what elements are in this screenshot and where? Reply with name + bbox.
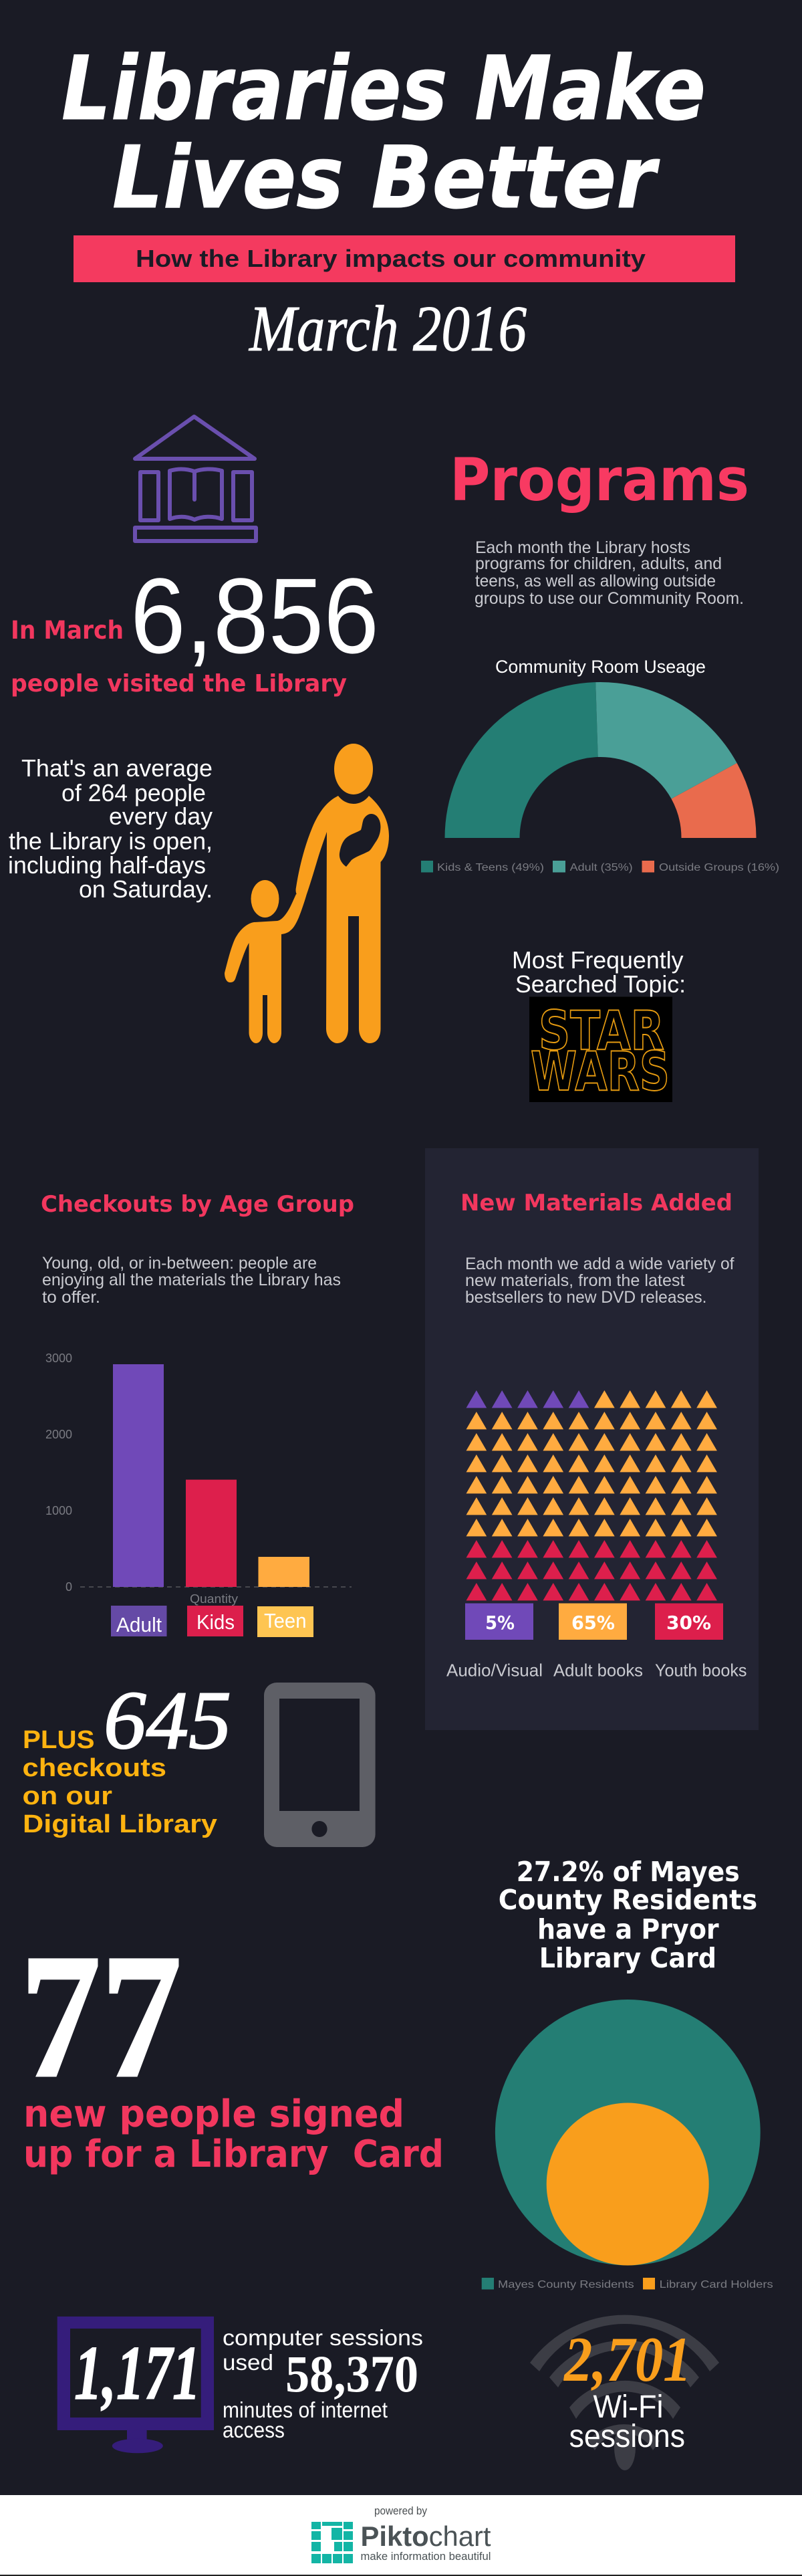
icon: parent with children — [225, 744, 389, 1043]
title: Libraries Make — [61, 37, 706, 140]
icon: library building — [135, 417, 256, 541]
stat: adult books 65%: 65% — [571, 1612, 615, 1634]
checkouts description — [42, 1254, 341, 1307]
wifi caption: Wi-Fi — [593, 2389, 663, 2425]
title: Lives Better — [112, 128, 660, 228]
county heading: County Residents — [499, 1884, 757, 1916]
label: kids — [187, 1606, 243, 1636]
panel: digital library — [23, 1675, 376, 1847]
label: teen — [257, 1606, 313, 1637]
average text: including half-days — [8, 851, 206, 879]
star wars logo — [529, 996, 672, 1103]
new card caption — [23, 2092, 444, 2176]
circle legend: Library Card Holders — [660, 2279, 773, 2290]
donut legend — [421, 861, 779, 873]
heading: programs: Programs — [450, 445, 749, 514]
stat: youth books 30% — [655, 1604, 747, 1680]
bar chart: checkouts: 1000 — [45, 1504, 72, 1517]
stat: youth books 30%: Youth books — [655, 1660, 747, 1680]
digital count: 645 — [104, 1675, 231, 1766]
title — [61, 37, 706, 228]
most searched heading — [512, 946, 686, 998]
materials description: bestsellers to new DVD releases. — [465, 1288, 707, 1307]
circle legend: Mayes County Residents — [498, 2279, 634, 2290]
panel: new library cards — [20, 1917, 444, 2176]
digital checkouts text: PLUS — [23, 1726, 95, 1754]
new card caption: up for a Library Card — [23, 2133, 444, 2176]
pictogram: triangles — [466, 1390, 717, 1601]
new card count: 77 — [20, 1917, 182, 2115]
footer: piktochart: powered by — [374, 2504, 427, 2517]
average text: every day — [109, 802, 213, 830]
most searched heading: Searched Topic: — [515, 970, 686, 998]
county heading: Library Card — [539, 1942, 716, 1974]
most searched heading: Most Frequently — [512, 946, 683, 974]
programs description: Each month the Library hosts — [475, 538, 690, 557]
materials description — [465, 1255, 734, 1307]
checkouts description: Young, old, or in-between: people are — [42, 1254, 317, 1273]
icon: wifi — [530, 2315, 719, 2470]
checkouts description: enjoying all the materials the Library has — [42, 1271, 341, 1289]
checkouts description: to offer. — [42, 1288, 100, 1307]
panel: new materials added — [425, 1148, 759, 1730]
stat: audio visual 5%: Audio/Visual — [446, 1660, 543, 1680]
label: adult — [111, 1606, 167, 1636]
computer sessions text: used — [223, 2350, 273, 2375]
panel: county residents — [482, 1856, 773, 2290]
programs description — [475, 538, 744, 608]
footer: piktochart: make information beautiful — [361, 2550, 491, 2563]
digital checkouts text: on our — [23, 1782, 112, 1810]
average text: on Saturday. — [79, 875, 213, 903]
average text — [8, 754, 213, 903]
materials description: Each month we add a wide variety of — [465, 1255, 734, 1273]
visitor count: 6,856 — [130, 556, 379, 675]
label: kids: Kids — [196, 1610, 235, 1634]
date: March 2016 — [248, 293, 527, 365]
programs description: teens, as well as allowing outside — [475, 572, 716, 591]
stat: adult books 65%: Adult books — [553, 1660, 643, 1680]
bar chart: checkouts — [45, 1352, 352, 1606]
wifi caption: sessions — [569, 2419, 685, 2454]
stat: audio visual 5% — [446, 1604, 543, 1680]
programs description: programs for children, adults, and — [475, 554, 722, 573]
footer: piktochart — [0, 2495, 802, 2576]
average text: That's an average — [21, 754, 213, 782]
stat: audio visual 5%: 5% — [485, 1612, 515, 1634]
digital checkouts text: checkouts — [23, 1754, 166, 1782]
wifi count: 2,701 — [563, 2324, 691, 2395]
subtitle banner — [74, 235, 735, 282]
heading: new materials: New Materials Added — [460, 1190, 732, 1216]
bar chart: checkouts: 3000 — [45, 1352, 72, 1365]
computer sessions text — [223, 2325, 423, 2442]
average text: the Library is open, — [9, 827, 213, 855]
new card caption: new people signed — [23, 2092, 404, 2136]
visitors caption: people visited the Library — [11, 670, 347, 697]
county heading: 27.2% of Mayes — [517, 1856, 740, 1888]
materials description: new materials, from the latest — [465, 1271, 685, 1290]
star wars logo: STAR — [539, 1000, 664, 1062]
panel: wifi sessions — [530, 2315, 719, 2470]
county heading: have a Pryor — [537, 1913, 719, 1945]
donut legend: Kids & Teens (49%) — [437, 862, 544, 873]
digital checkouts text — [23, 1726, 217, 1838]
digital checkouts text: Digital Library — [23, 1810, 217, 1838]
heading: checkouts: Checkouts by Age Group — [41, 1191, 354, 1218]
chart title: Community Room Useage — [495, 657, 706, 677]
computer session count: 1,171 — [74, 2331, 200, 2416]
panel: programs — [421, 445, 779, 1103]
average text: of 264 people — [61, 779, 206, 807]
label: adult: Adult — [116, 1613, 162, 1636]
star wars logo: WARS — [531, 1041, 670, 1103]
subtitle banner: How the Library impacts our community — [136, 245, 646, 272]
computer sessions text: computer sessions — [223, 2325, 423, 2350]
label: teen: Teen — [264, 1609, 306, 1632]
in march label: In March — [11, 616, 124, 645]
panel: checkouts by age group — [41, 1191, 354, 1637]
donut legend: Adult (35%) — [570, 862, 633, 873]
footer: piktochart: Piktochart — [361, 2520, 491, 2552]
bar chart: checkouts: 0 — [65, 1580, 72, 1594]
stat: adult books 65% — [553, 1604, 643, 1680]
donut chart: community room usage — [445, 682, 757, 838]
donut legend: Outside Groups (16%) — [659, 862, 779, 873]
bar chart: checkouts: 2000 — [45, 1428, 72, 1441]
bar chart: checkouts: Quantity — [190, 1592, 238, 1606]
programs description: groups to use our Community Room. — [475, 589, 744, 608]
computer sessions text: access — [223, 2418, 285, 2442]
computer sessions text: minutes of internet — [223, 2397, 388, 2422]
circle legend — [482, 2278, 773, 2290]
icon: monitor — [57, 2317, 214, 2453]
stat: youth books 30%: 30% — [666, 1612, 711, 1634]
icon: tablet — [264, 1683, 376, 1847]
icon: piktochart logo — [311, 2522, 353, 2563]
panel: computer sessions — [57, 2317, 423, 2453]
internet minutes count: 58,370 — [285, 2345, 418, 2403]
chart: nested circles — [495, 2000, 761, 2266]
wifi caption — [569, 2389, 685, 2454]
county heading — [499, 1856, 757, 1974]
panel: visitors — [8, 417, 389, 1043]
